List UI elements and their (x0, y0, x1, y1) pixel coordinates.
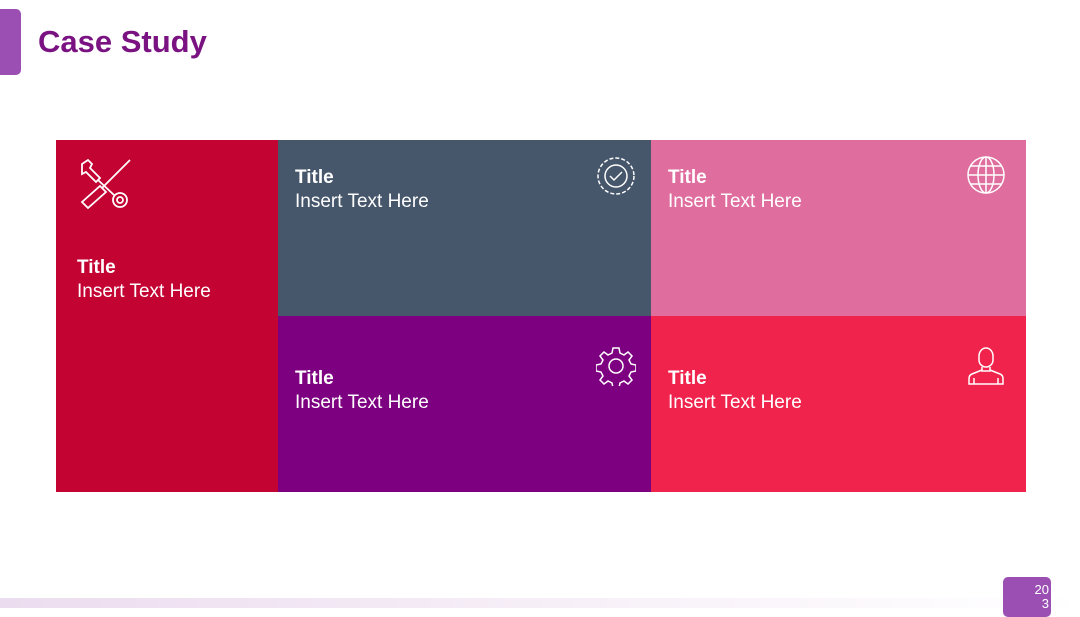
page number badge: 20 (1035, 582, 1049, 597)
page number badge: 3 (1042, 596, 1049, 611)
panel: slate (278, 140, 651, 316)
page number badge (1003, 577, 1051, 617)
panel: pink (651, 140, 1026, 316)
text block (77, 257, 211, 302)
text block: Title (295, 368, 334, 389)
text block: Title (668, 368, 707, 389)
icon: check badge (597, 157, 635, 195)
title: Case Study (38, 24, 207, 59)
text block: Insert Text Here (668, 392, 802, 413)
text block: Title (668, 167, 707, 188)
text block (295, 368, 429, 413)
text block (668, 167, 802, 212)
text block: Title (77, 257, 116, 278)
text block (668, 368, 802, 413)
icon: person (968, 347, 1004, 385)
accent tab (0, 9, 21, 75)
text block: Title (295, 167, 334, 188)
panel: purple (278, 316, 651, 492)
panel: red (651, 316, 1026, 492)
text block (295, 167, 429, 212)
icon: tools (80, 158, 131, 210)
text block: Insert Text Here (77, 281, 211, 302)
panel: left red (56, 140, 278, 492)
footer gradient bar (0, 598, 1080, 608)
icon: globe (967, 156, 1005, 194)
icon: gear (596, 347, 636, 386)
text block: Insert Text Here (295, 191, 429, 212)
text block: Insert Text Here (668, 191, 802, 212)
text block: Insert Text Here (295, 392, 429, 413)
